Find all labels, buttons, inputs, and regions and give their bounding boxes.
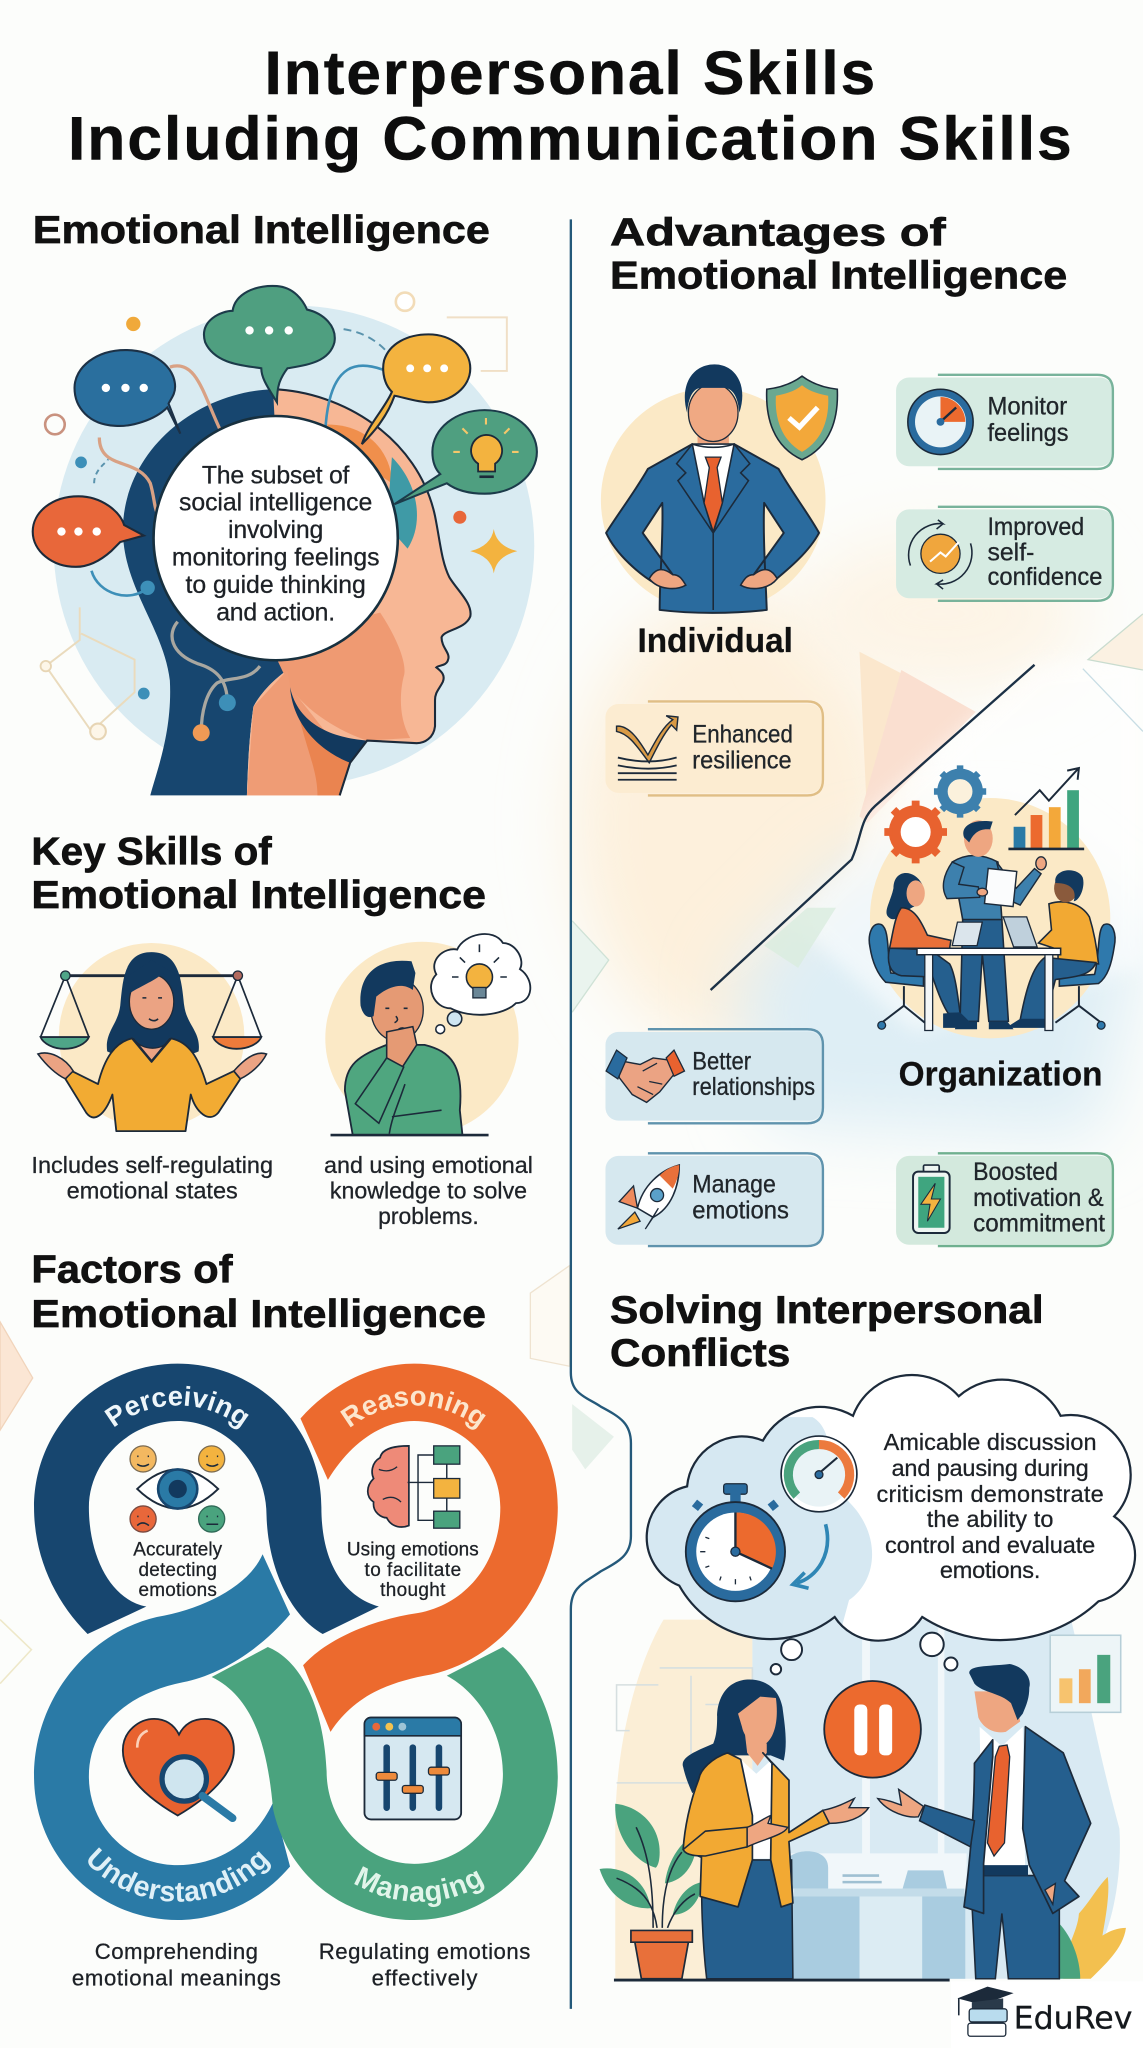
- text: managing: Regulating emotions: [319, 1939, 530, 1964]
- heading: Solving Conflicts: [610, 1289, 1044, 1375]
- speech bubble lightbulb: [395, 410, 537, 504]
- illustration: man speaking: [878, 1664, 1091, 1979]
- person seated left: [886, 873, 976, 1028]
- card: Enhanced resilience: resilience: [692, 748, 792, 775]
- card: Better relationships: [605, 1029, 823, 1123]
- icon: brain with flowchart: [368, 1446, 460, 1528]
- hands: [747, 1816, 788, 1847]
- text: understanding: [72, 1939, 281, 1990]
- speech bubble green cloud: [204, 286, 335, 402]
- heading: Advantages: Emotional Intelligence: [610, 255, 1067, 298]
- text: reasoning: [347, 1540, 479, 1601]
- icon: resilience arrow: [617, 716, 678, 780]
- text: key skills captions: knowledge to solve: [330, 1177, 527, 1203]
- icon: handshake: [606, 1050, 684, 1102]
- card: Enhanced resilience: [605, 701, 823, 795]
- card: Better relationships: Better: [692, 1049, 751, 1076]
- icon: stopwatch: [686, 1484, 785, 1601]
- text: key skills captions: [31, 1152, 533, 1229]
- text: reasoning: Using emotions: [347, 1540, 479, 1561]
- icon: pause button: [824, 1681, 921, 1778]
- icon: orange gear: [884, 801, 947, 863]
- text: Organization: Organization: [899, 1055, 1102, 1093]
- jacket: [964, 1727, 1091, 1913]
- text: key skills captions: and using emotional: [324, 1152, 533, 1178]
- chair left: [869, 924, 925, 1029]
- card: Improved self-confidence: self-: [987, 539, 1034, 566]
- illustration: woman with balance scale: [38, 943, 267, 1131]
- text: understanding: Comprehending: [95, 1939, 258, 1964]
- hand at chin: [387, 1027, 417, 1067]
- text: perceiving: emotions: [139, 1580, 217, 1601]
- heading: Solving Conflicts: Conflicts: [610, 1332, 790, 1375]
- text: managing: [319, 1939, 530, 1990]
- heading: Factors: Factors of: [31, 1249, 234, 1292]
- heading: Emotional Intelligence: Emotional Intelligence: [33, 209, 490, 252]
- text: key skills captions: emotional states: [67, 1177, 238, 1203]
- neck: [247, 670, 350, 795]
- icon: heart with magnifier: [123, 1719, 234, 1818]
- title: [68, 39, 1074, 173]
- title: Interpersonal Skills: [265, 39, 877, 108]
- arrow: countdown: [793, 1524, 827, 1588]
- thought cloud with text: criticism demonstrate: [876, 1481, 1104, 1507]
- card: Better relationships: relationships: [692, 1074, 815, 1101]
- person seated right: [1006, 870, 1099, 1028]
- card: Improved self-confidence: Improved: [987, 514, 1084, 541]
- text: perceiving: Accurately: [133, 1540, 223, 1561]
- heading: Factors: Emotional Intelligence: [31, 1293, 486, 1336]
- title: Including Communication Skills: [68, 104, 1074, 173]
- speech bubble blue: [75, 350, 180, 434]
- thought cloud with text: control and evaluate: [885, 1532, 1095, 1558]
- arm: [920, 1805, 974, 1847]
- chart: small bars on wall: [1050, 1635, 1121, 1712]
- illustration: office background: [615, 1620, 1126, 1979]
- illustration: woman speaking: [683, 1680, 869, 1979]
- icon: sliders window: [364, 1718, 461, 1819]
- icon: shield: [767, 376, 837, 460]
- band: understanding: [34, 1554, 290, 1920]
- text: reasoning: thought: [380, 1580, 446, 1601]
- hand: [878, 1789, 924, 1817]
- heading: Advantages: [610, 212, 1067, 298]
- thought cloud with text: the ability to: [927, 1506, 1053, 1532]
- head face: [247, 389, 471, 795]
- card: Manage emotions: Manage: [692, 1171, 776, 1198]
- card: Improved self-confidence: [896, 507, 1113, 601]
- heading: Key Skills: Emotional Intelligence: [31, 874, 486, 917]
- central white circle definition: [154, 416, 398, 660]
- illustration: organization team: [869, 765, 1115, 1038]
- central white circle definition: The subset of: [202, 462, 350, 489]
- label: Perceiving: Perceiving: [104, 1386, 249, 1430]
- diagonal divider line: [711, 665, 1035, 990]
- card: Manage emotions: [605, 1153, 823, 1246]
- forearm: [355, 1058, 404, 1123]
- icon: battery: [913, 1165, 950, 1233]
- chair right: [1055, 924, 1115, 1029]
- text: Individual: Individual: [637, 622, 793, 660]
- card: Improved self-confidence: confidence: [987, 564, 1102, 591]
- heading: Advantages: Advantages of: [610, 212, 947, 255]
- band: reasoning: [300, 1364, 558, 1732]
- card: Boosted motivation and commitment: motivation &: [973, 1185, 1104, 1212]
- illustration: potted plant: [600, 1804, 703, 1979]
- icon: rocket: [618, 1165, 679, 1229]
- text: managing: effectively: [372, 1965, 478, 1990]
- text: key skills captions: problems.: [378, 1203, 479, 1229]
- icon: gauge clock: [908, 389, 973, 455]
- icon: gauge: [781, 1436, 857, 1512]
- cheek shade: [268, 613, 410, 741]
- central white circle definition: monitoring feelings: [172, 545, 379, 572]
- icon: blue gear: [934, 765, 986, 818]
- logo: EduRev: [951, 1981, 1143, 2048]
- center divider line: [571, 219, 631, 2009]
- band: perceiving: [34, 1364, 379, 1634]
- heading: Key Skills: [31, 831, 486, 917]
- card: Monitor feelings: feelings: [987, 420, 1068, 447]
- text: reasoning: to facilitate: [364, 1560, 461, 1581]
- chart: growth bars: [1008, 768, 1084, 849]
- thought cloud with text: [640, 1375, 1135, 1648]
- thought bubbles small: [771, 1633, 957, 1674]
- blazer: [683, 1753, 829, 1907]
- head back: [123, 389, 353, 795]
- speech bubble yellow: [362, 334, 470, 444]
- wires: [99, 366, 220, 512]
- label: Understanding: Understanding: [88, 1847, 271, 1902]
- text: understanding: emotional meanings: [72, 1965, 281, 1990]
- central white circle definition: social intelligence: [179, 490, 372, 517]
- decor dots: [126, 317, 140, 331]
- card: Boosted motivation and commitment: [896, 1153, 1113, 1246]
- thought cloud with text: emotions.: [940, 1557, 1040, 1583]
- band: managing: [212, 1647, 558, 1920]
- laptops: [952, 922, 982, 946]
- central white circle definition: involving: [228, 517, 323, 544]
- card: Monitor feelings: Monitor: [987, 394, 1067, 421]
- card: Manage emotions: emotions: [692, 1198, 789, 1225]
- text: perceiving: [133, 1540, 223, 1601]
- text: perceiving: detecting: [139, 1560, 217, 1581]
- central white circle definition: to guide thinking: [186, 572, 366, 599]
- card: Enhanced resilience: Enhanced: [692, 722, 793, 749]
- person standing: [943, 820, 1046, 1029]
- heading: Key Skills: Key Skills of: [31, 831, 273, 874]
- illustration: thinking man: [325, 934, 530, 1135]
- icon: eye with faces: [130, 1446, 225, 1532]
- trousers: [971, 1876, 1059, 1979]
- thought cloud with text: and pausing during: [891, 1455, 1089, 1481]
- illustration: individual businessman: [601, 364, 837, 613]
- card: Monitor feelings: [896, 375, 1113, 469]
- text: key skills captions: Includes self-regulating: [31, 1152, 273, 1178]
- label: Reasoning: Reasoning: [340, 1390, 486, 1430]
- panel: emotional intelligence head illustration: [33, 286, 537, 795]
- diagram: four factors loops: [34, 1364, 558, 1990]
- forearm: [683, 1827, 747, 1856]
- thought cloud with text: Amicable discussion: [884, 1429, 1097, 1455]
- heading: Factors: [31, 1249, 486, 1336]
- card: Boosted motivation and commitment: Boosted: [973, 1159, 1058, 1186]
- ground line: [614, 1979, 950, 1981]
- central white circle definition: and action.: [216, 599, 335, 626]
- speech bubble orange: [33, 496, 144, 567]
- icon: graduation cap with books: [957, 1987, 1014, 2036]
- icon: rotating arrows badge: [909, 520, 972, 589]
- face outline: [273, 389, 471, 795]
- label: Managing: Managing: [354, 1866, 484, 1907]
- logo: EduRev: EduRev: [1014, 2001, 1132, 2036]
- card: Boosted motivation and commitment: commitment: [973, 1211, 1105, 1238]
- tie: [988, 1745, 1010, 1856]
- heading: Solving Conflicts: Solving Interpersonal: [610, 1289, 1044, 1332]
- plant: yellow leaves: [1063, 1877, 1126, 1979]
- table: [917, 948, 1061, 955]
